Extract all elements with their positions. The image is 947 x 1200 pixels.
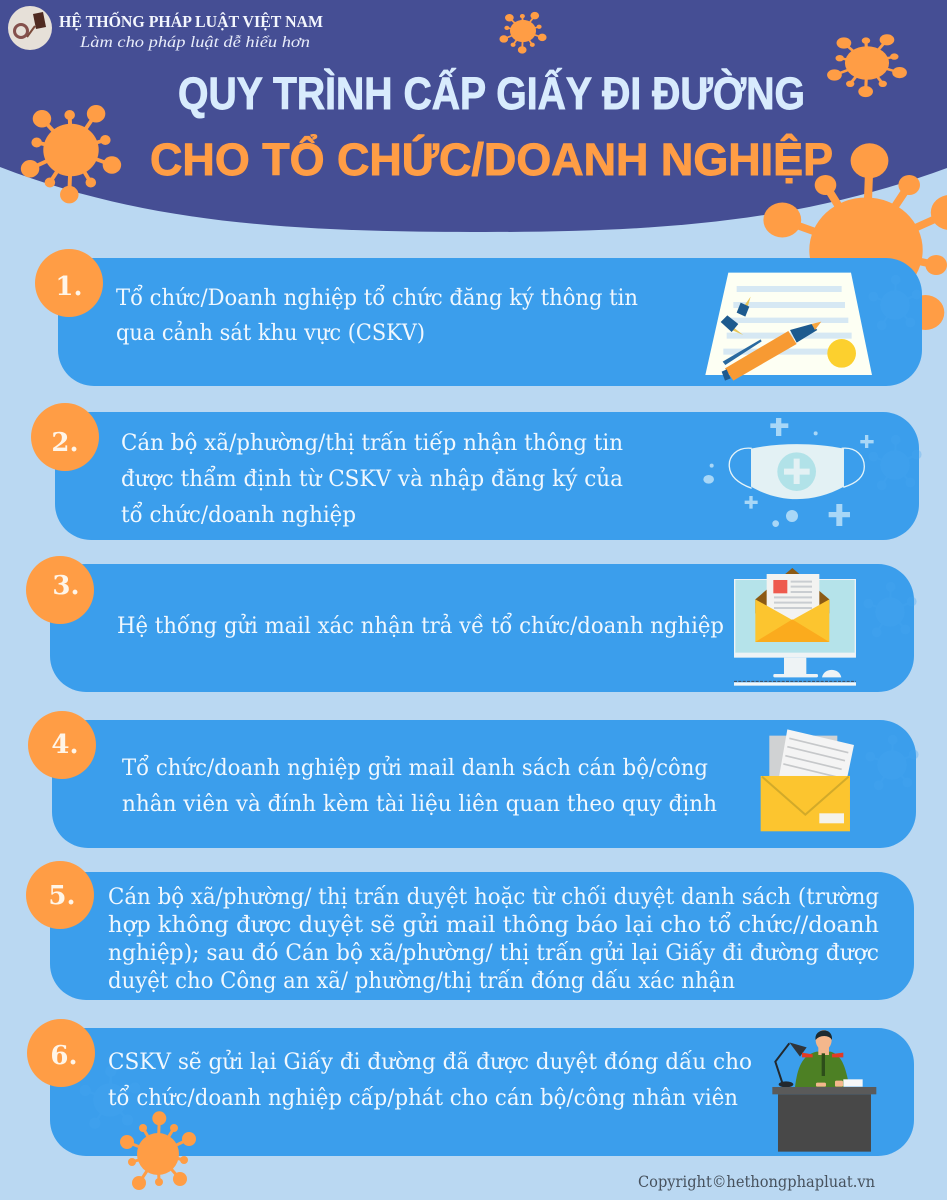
- number badge 1: [35, 249, 103, 317]
- step 5 text: nghiệp); sau đó Cán bộ xã/phường/ thị trấn gửi lại Giấy đi đường được: [108, 940, 879, 966]
- panel: step 5: [26, 861, 914, 1000]
- step 2 text: được thẩm định từ CSKV và nhập đăng ký của: [121, 464, 623, 492]
- title line 2: CHO TỔ CHỨC/DOANH NGHIỆP: [150, 134, 833, 185]
- panel: step 2: [31, 403, 922, 540]
- background pattern 3: [863, 582, 917, 637]
- background pattern 2: [868, 435, 922, 490]
- header banner: [0, 0, 947, 232]
- title line 1: QUY TRÌNH CẤP GIẤY ĐI ĐƯỜNG: [178, 68, 805, 119]
- step 2 text: [121, 430, 623, 528]
- step 1 text: Tổ chức/Doanh nghiệp tổ chức đăng ký thông tin: [116, 283, 638, 311]
- panel: step 1: [35, 249, 922, 386]
- icon: large virus top right: [763, 143, 947, 340]
- card 3: [50, 564, 914, 692]
- number badge 2: 2.: [51, 428, 79, 458]
- panel: step 6: [27, 1019, 914, 1190]
- card 2: [55, 412, 919, 540]
- background pattern 6: [80, 1066, 140, 1129]
- card 6: [50, 1028, 914, 1156]
- step 3 text: Hệ thống gửi mail xác nhận trả về tổ chức/doanh nghiệp: [117, 611, 724, 639]
- logo: [8, 6, 52, 50]
- number badge 6: 6.: [50, 1041, 78, 1071]
- number badge 4: [28, 711, 96, 779]
- background pattern 4: [865, 735, 919, 790]
- number badge 6: [27, 1019, 95, 1087]
- step 2 text: Cán bộ xã/phường/thị trấn tiếp nhận thông tin: [121, 430, 623, 456]
- brand name: HỆ THỐNG PHÁP LUẬT VIỆT NAM: [59, 11, 323, 31]
- icon: small virus top centre: [499, 12, 547, 54]
- panel: step 3: [26, 556, 917, 692]
- icon: virus bottom left: [120, 1111, 196, 1190]
- step 5 text: [108, 884, 879, 994]
- step 4 text: [122, 753, 717, 817]
- step 1 text: qua cảnh sát khu vực (CSKV): [116, 320, 425, 346]
- step 6 text: tổ chức/doanh nghiệp cấp/phát cho cán bộ/công nhân viên: [108, 1083, 738, 1111]
- icon: virus top right: [827, 34, 907, 97]
- step 6 text: [108, 1049, 752, 1111]
- brand slogan: Làm cho pháp luật dễ hiểu hơn: [79, 34, 310, 51]
- icon: virus left of title: [21, 105, 121, 203]
- background pattern 1: [868, 275, 922, 330]
- step 1 text: [116, 283, 638, 346]
- icon: envelope with documents: [761, 729, 854, 831]
- icon: face mask: [703, 418, 874, 527]
- panel: step 4: [28, 711, 919, 848]
- icon: computer with mail: [734, 568, 856, 686]
- card 4: [52, 720, 916, 848]
- number badge 2: [31, 403, 99, 471]
- number badge 4: 4.: [51, 730, 79, 760]
- step 4 text: Tổ chức/doanh nghiệp gửi mail danh sách cán bộ/công: [122, 753, 708, 781]
- number badge 1: 1.: [55, 272, 83, 302]
- step 4 text: nhân viên và đính kèm tài liệu liên quan theo quy định: [122, 792, 717, 817]
- card 1: [58, 258, 922, 386]
- number badge 5: 5.: [48, 881, 76, 911]
- step 5 text: duyệt cho Công an xã/ phường/thị trấn đóng dấu xác nhận: [108, 968, 735, 994]
- step 5 text: hợp không được duyệt sẽ gửi mail thông báo lại cho tổ chức//doanh: [108, 910, 879, 938]
- icon: paper, pins and pen: [705, 273, 872, 381]
- number badge 3: 3.: [52, 571, 80, 601]
- step 2 text: tổ chức/doanh nghiệp: [121, 500, 356, 528]
- step 6 text: CSKV sẽ gửi lại Giấy đi đường đã được duyệt đóng dấu cho: [108, 1049, 752, 1075]
- card 5: [50, 872, 914, 1000]
- number badge 3: [26, 556, 94, 624]
- step 5 text: Cán bộ xã/phường/ thị trấn duyệt hoặc từ chối duyệt danh sách (trường: [108, 884, 879, 910]
- number badge 5: [26, 861, 94, 929]
- icon: police officer at desk: [772, 1030, 876, 1152]
- copyright: Copyright©hethongphapluat.vn: [638, 1172, 875, 1191]
